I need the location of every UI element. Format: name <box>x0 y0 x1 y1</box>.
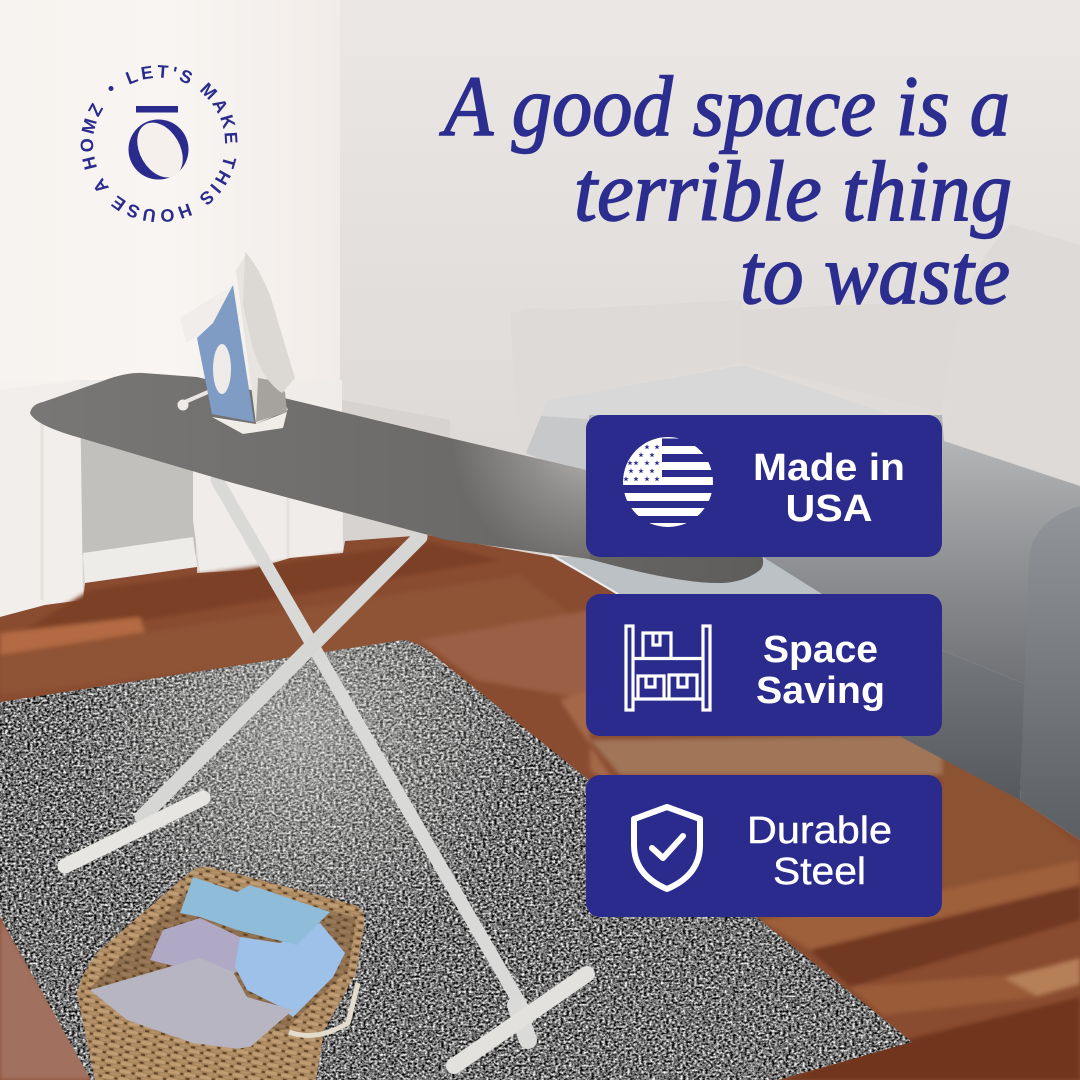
icon: shield with check <box>634 807 700 889</box>
badge label: Made in <box>753 447 905 489</box>
iron on the board <box>178 252 295 434</box>
badge label <box>747 810 892 893</box>
logo badge <box>80 65 238 222</box>
headline <box>439 58 1012 322</box>
sofa right arm <box>1020 506 1080 840</box>
badge label: USA <box>786 488 872 530</box>
laundry basket <box>77 867 364 1080</box>
icon: US flag <box>623 436 713 528</box>
headline: A good space is a <box>439 58 1010 154</box>
badge: Durable Steel <box>586 775 942 917</box>
room background wall <box>0 0 1080 620</box>
badge label: Saving <box>756 670 885 712</box>
sofa front cushion <box>589 415 1080 684</box>
basket interior shadow <box>91 880 356 1030</box>
sofa <box>511 224 1080 840</box>
badge label <box>753 447 905 530</box>
sofa seat <box>541 365 888 480</box>
ironing board legs <box>65 480 587 1066</box>
badge: Made in USA <box>586 415 942 557</box>
badge label <box>756 629 885 712</box>
window and curtains <box>0 0 450 617</box>
basket front wall <box>77 973 356 1080</box>
logo mark <box>128 106 192 186</box>
circular tagline: LET'S MAKE THIS HOUSE A HOMZ <box>80 65 238 222</box>
sofa skirt under the board <box>552 557 822 594</box>
headline: to waste <box>740 226 1010 322</box>
wood floor <box>0 535 1080 1080</box>
badge: Space Saving <box>586 594 942 736</box>
rug <box>0 640 915 1080</box>
folded clothes <box>90 877 345 1050</box>
rope handle <box>289 983 358 1035</box>
badge label: Space <box>763 629 878 671</box>
headline: terrible thing <box>574 143 1012 239</box>
ironing board <box>30 373 763 583</box>
sofa left arm and back <box>511 300 742 470</box>
icon: storage shelf <box>626 626 710 710</box>
badge label: Steel <box>773 851 866 893</box>
badge label: Durable <box>747 810 892 852</box>
